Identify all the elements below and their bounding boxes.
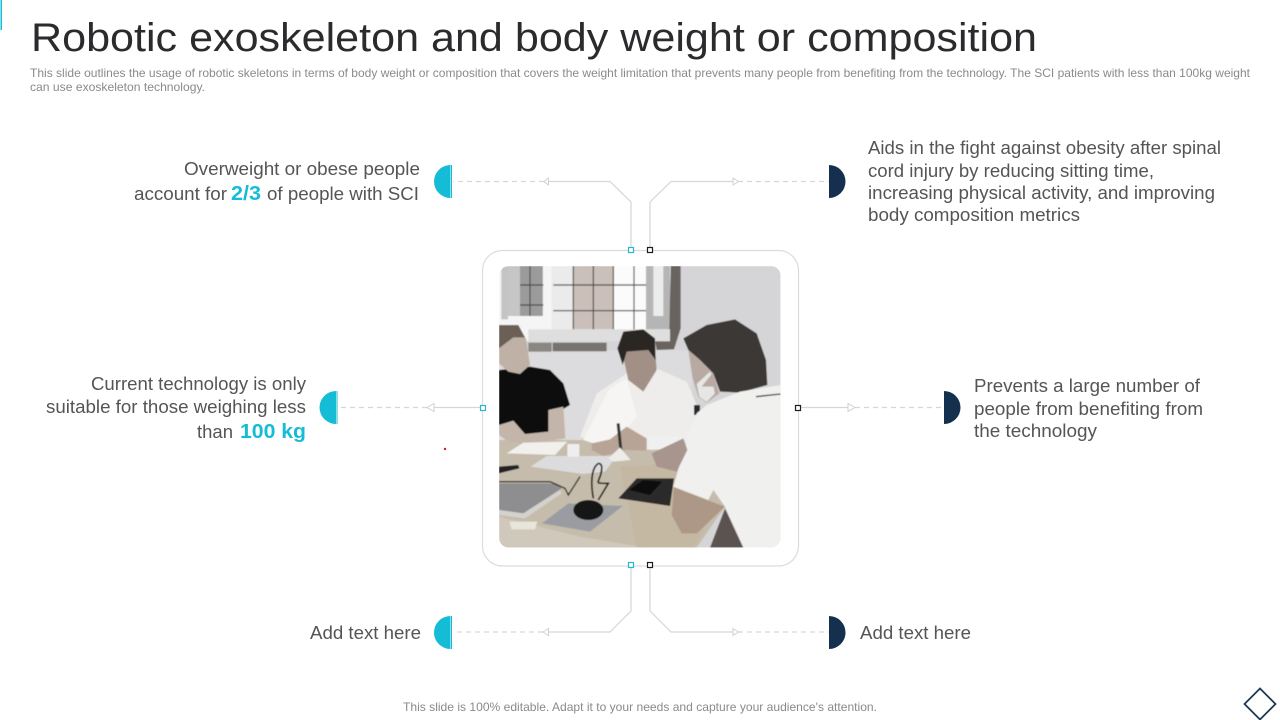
text: weight limit [46,373,307,443]
text: placeholder bottom left: Add text here [310,622,421,643]
text: weight limit: than [197,421,233,442]
marker: bottom right [829,616,846,649]
central photo card [482,250,798,566]
text: weight limit: 100 kg [240,421,306,443]
text: obesity fight: increasing physical activity, and improving [868,182,1215,203]
connector: bottom right [650,565,829,636]
person right [683,319,767,393]
marker: top left [434,165,452,198]
title: Robotic exoskeleton and body weight or composition [31,16,1037,60]
anchor squares [480,248,800,568]
text: overweight share: of people with SCI [267,183,419,204]
text: placeholder bottom right: Add text here [860,622,971,643]
connector: bottom left [453,565,631,636]
text: prevents benefit: people from benefiting from [974,398,1203,419]
person left [499,367,570,442]
connector: middle left [338,404,483,412]
connector: top left [453,178,631,250]
photo: meeting around a table [499,266,781,548]
connector: top right [650,178,829,250]
person centre [580,368,697,450]
text: obesity fight: cord injury by reducing sitting time, [868,160,1154,181]
icon: diamond [1244,688,1276,720]
intro text: This slide outlines the usage of robotic skeletons in terms of body weight or composition that covers the weight limitation that prevents many people from benefiting from the technology. The SCI patients with less than 100kg weight [30,66,1251,80]
text: obesity fight: Aids in the fight against obesity after spinal [868,137,1221,158]
stray red dot [444,448,446,450]
text: prevents benefit: Prevents a large number of [974,375,1201,396]
footer note: This slide is 100% editable. Adapt it to your needs and capture your audience's attention. [403,700,877,714]
text: weight limit: Current technology is only [91,373,307,394]
corner accent line [0,0,2,30]
intro text: can use exoskeleton technology. [30,80,205,94]
connector: middle right [798,404,944,412]
text: overweight share: 2/3 [231,183,261,205]
marker: middle left [320,391,338,424]
intro text [30,66,1251,94]
text: weight limit: suitable for those weighing less [46,396,306,417]
marker: middle right [944,391,961,424]
window [499,266,676,341]
text: overweight share: Overweight or obese people [184,158,420,179]
table [499,440,725,548]
marker: bottom left [434,616,452,649]
text: prevents benefit [974,375,1203,441]
marker: top right [829,165,846,198]
text: obesity fight: body composition metrics [868,204,1080,225]
text: overweight share: account for [134,183,227,204]
text: overweight share [134,158,420,205]
text: prevents benefit: the technology [974,420,1098,441]
text: obesity fight [868,137,1221,225]
items on table [507,442,567,455]
